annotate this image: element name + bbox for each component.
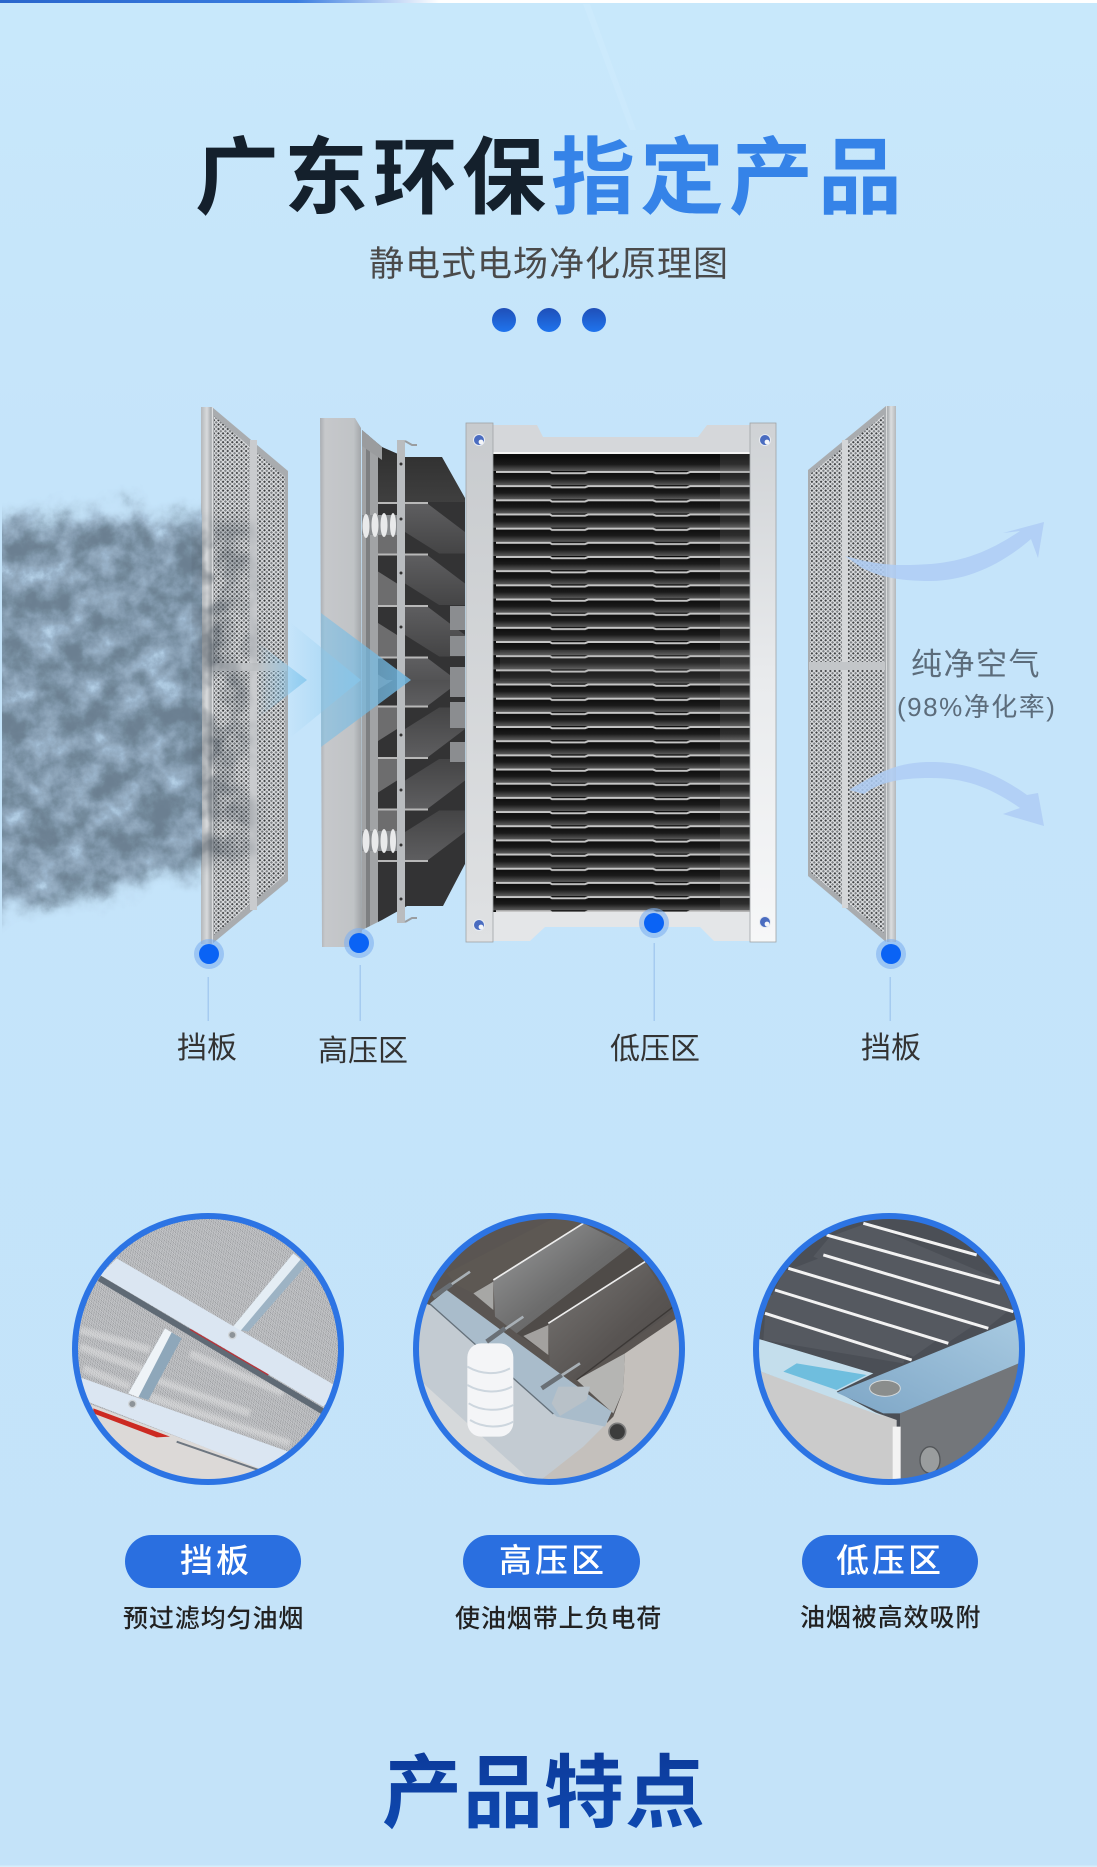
- decorative three dots: [492, 308, 606, 332]
- lower left silver: [761, 1372, 897, 1479]
- section labels: [177, 1032, 921, 1068]
- front fin B: [548, 1262, 652, 1368]
- insulator lower: [362, 829, 398, 853]
- section labels: 低压区: [610, 1033, 700, 1066]
- smoke cloud: [0, 515, 240, 915]
- captions: 预过滤均匀油烟: [123, 1605, 304, 1633]
- rail: [430, 1290, 612, 1427]
- pill: high voltage: 高压区: [499, 1542, 607, 1579]
- detail circle: high voltage: [410, 1210, 690, 1490]
- blue plate: [837, 1315, 1027, 1413]
- low voltage section: [466, 423, 776, 942]
- main bar: [100, 1258, 340, 1407]
- left plate: [466, 423, 493, 942]
- lower right dark: [900, 1364, 1018, 1478]
- struts: [232, 1253, 307, 1332]
- bottom heading: 产品特点: [382, 1749, 706, 1838]
- pill: low voltage: 低压区: [836, 1542, 944, 1579]
- left baffle filter: [201, 407, 288, 944]
- marker: low voltage: [639, 908, 669, 1021]
- detail circle: low voltage: [750, 1210, 1030, 1490]
- detail circle: baffle: [70, 1210, 350, 1490]
- captions: 油烟被高效吸附: [800, 1604, 981, 1632]
- clean air label: (98%净化率): [897, 692, 1056, 722]
- right plate: [542, 1319, 679, 1479]
- high voltage plate: [320, 418, 362, 947]
- high voltage strip: [397, 440, 417, 923]
- high voltage section: [320, 418, 466, 947]
- gap fin: [517, 1247, 645, 1353]
- lower bar: [81, 1378, 288, 1468]
- section labels: 挡板: [177, 1032, 237, 1065]
- interior metal: [577, 1353, 625, 1413]
- pill: baffle: [125, 1535, 301, 1588]
- airflow arrows entering: [257, 613, 411, 747]
- left band: [757, 1338, 883, 1417]
- marker: high voltage: [344, 928, 374, 1021]
- marker: right baffle: [876, 939, 906, 1021]
- clean air arrow lower: [849, 762, 1044, 826]
- bottom band: [493, 912, 750, 941]
- subtitle: 静电式电场净化原理图: [369, 245, 729, 284]
- high voltage fin block: [362, 430, 466, 932]
- pill: low voltage: [802, 1535, 978, 1588]
- top band: [493, 425, 750, 453]
- insulator upper: [362, 513, 398, 538]
- marker: left baffle: [194, 939, 224, 1021]
- insulator: [467, 1343, 513, 1437]
- captions: [123, 1604, 981, 1633]
- pill: baffle: 挡板: [180, 1542, 252, 1579]
- clean air arrow upper: [845, 522, 1044, 581]
- clean air label: 纯净空气: [911, 647, 1041, 682]
- title: 广东环保指定产品: [195, 131, 907, 225]
- smoke over baffle: [198, 525, 262, 860]
- section labels: 挡板: [861, 1032, 921, 1065]
- front fin A: [493, 1223, 630, 1333]
- floor: [419, 1304, 608, 1479]
- right plate: [750, 423, 776, 942]
- screws: [474, 434, 770, 930]
- clip hardware: [433, 1272, 590, 1416]
- back panel: [473, 1282, 493, 1310]
- lower wedge: [90, 1404, 259, 1479]
- right baffle filter: [808, 406, 896, 942]
- captions: 使油烟带上负电荷: [455, 1605, 662, 1633]
- section labels: 高压区: [318, 1035, 408, 1068]
- pill: high voltage: [463, 1535, 640, 1588]
- clean air label: [897, 647, 1056, 722]
